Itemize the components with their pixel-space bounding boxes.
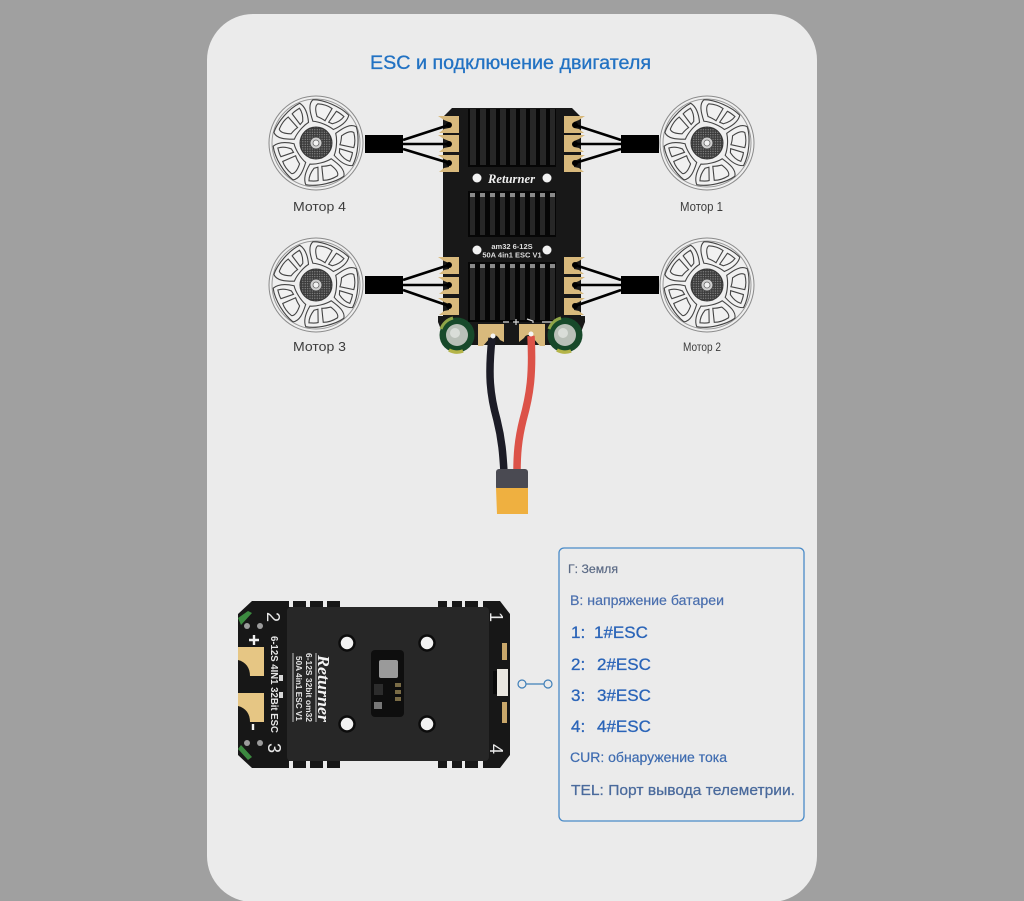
motor 4: [269, 96, 363, 214]
board logo: Returner: [487, 171, 536, 186]
corner numbers: 4: [486, 744, 506, 754]
board model text: am32 6-12S: [491, 242, 533, 251]
motor 2 cable: [572, 262, 659, 309]
legend ground: Г: Земля: [568, 562, 618, 576]
motor 2: Мотор 2: [683, 340, 721, 354]
legend ESC 2: 2:: [571, 655, 585, 674]
corner numbers: 1: [486, 612, 506, 622]
corner numbers: [263, 612, 506, 754]
plate model text: 50A 4in1 ESC V1: [294, 656, 304, 721]
motor 1: [660, 96, 754, 214]
gold battery pads: [238, 647, 264, 722]
plate divider lines: [293, 653, 316, 722]
battery wires and XT connector: [490, 332, 534, 514]
mounting holes: [472, 174, 552, 254]
pads dots: [244, 623, 263, 746]
PCB outline: [238, 601, 510, 768]
legend ESC 2: 2#ESC: [597, 655, 651, 674]
black wire: [490, 338, 504, 472]
side label: 6-12S 4IN1 32Bit ESC: [268, 636, 279, 733]
heatsink middle: [468, 191, 556, 237]
motor 1 cable: [572, 122, 659, 166]
metal plate: [287, 607, 489, 761]
legend current: CUR: обнаружение тока: [570, 750, 727, 765]
motor 4: Мотор 4: [293, 199, 346, 214]
legend ESC 1: 1#ESC: [594, 623, 648, 642]
power solder pads: [478, 324, 545, 346]
corner numbers: 2: [263, 612, 283, 622]
capacitors: [440, 318, 582, 352]
wire tips: [490, 332, 534, 338]
legend ESC 3: 3:: [571, 686, 585, 705]
small components: [279, 675, 283, 698]
plus and minus marks: [249, 635, 259, 730]
panel: pin legend: [559, 548, 804, 821]
castellated teeth: [280, 601, 500, 768]
corner numbers: 3: [264, 743, 284, 753]
motor 1: Мотор 1: [680, 199, 723, 214]
PCB green edge: [238, 611, 252, 760]
motor 4 cable: [365, 122, 452, 166]
board body: [438, 108, 585, 345]
legend ESC 4: 4#ESC: [597, 717, 651, 736]
polarity marks: [503, 319, 552, 325]
legend battery voltage: В: напряжение батареи: [570, 593, 724, 608]
motor 3: [269, 238, 363, 354]
heatsink upper: [468, 109, 556, 167]
red wire: [517, 336, 532, 472]
plate window with components: [371, 650, 404, 717]
plate model text: 6-12S 32bit om32: [304, 653, 314, 722]
legend ESC 3: 3#ESC: [597, 686, 651, 705]
legend frame: [559, 548, 804, 821]
legend telemetry: TEL: Порт вывода телеметрии.: [571, 782, 795, 799]
heatsink lower: [468, 262, 556, 322]
motor 2: [660, 238, 754, 354]
plate logo: Returner: [314, 654, 333, 722]
plate holes: [340, 636, 434, 732]
board model text: 50A 4in1 ESC V1: [482, 250, 542, 260]
motor 3 cable: [365, 262, 452, 309]
panel: card background: [207, 14, 817, 901]
motor solder pads: [438, 116, 585, 315]
motor 3: Мотор 3: [293, 339, 346, 354]
telemetry connector: [493, 643, 508, 723]
legend ESC 1: 1:: [571, 623, 585, 642]
plate model text: [294, 653, 314, 722]
connector housing: [496, 469, 528, 490]
connector link: [518, 680, 552, 688]
ESC bottom board: [238, 601, 510, 768]
title: ESC и подключение двигателя: [370, 53, 651, 74]
board model text: [482, 242, 542, 260]
ESC top board: [438, 108, 585, 352]
connector plug: [496, 488, 528, 514]
legend ESC 4: 4:: [571, 717, 585, 736]
